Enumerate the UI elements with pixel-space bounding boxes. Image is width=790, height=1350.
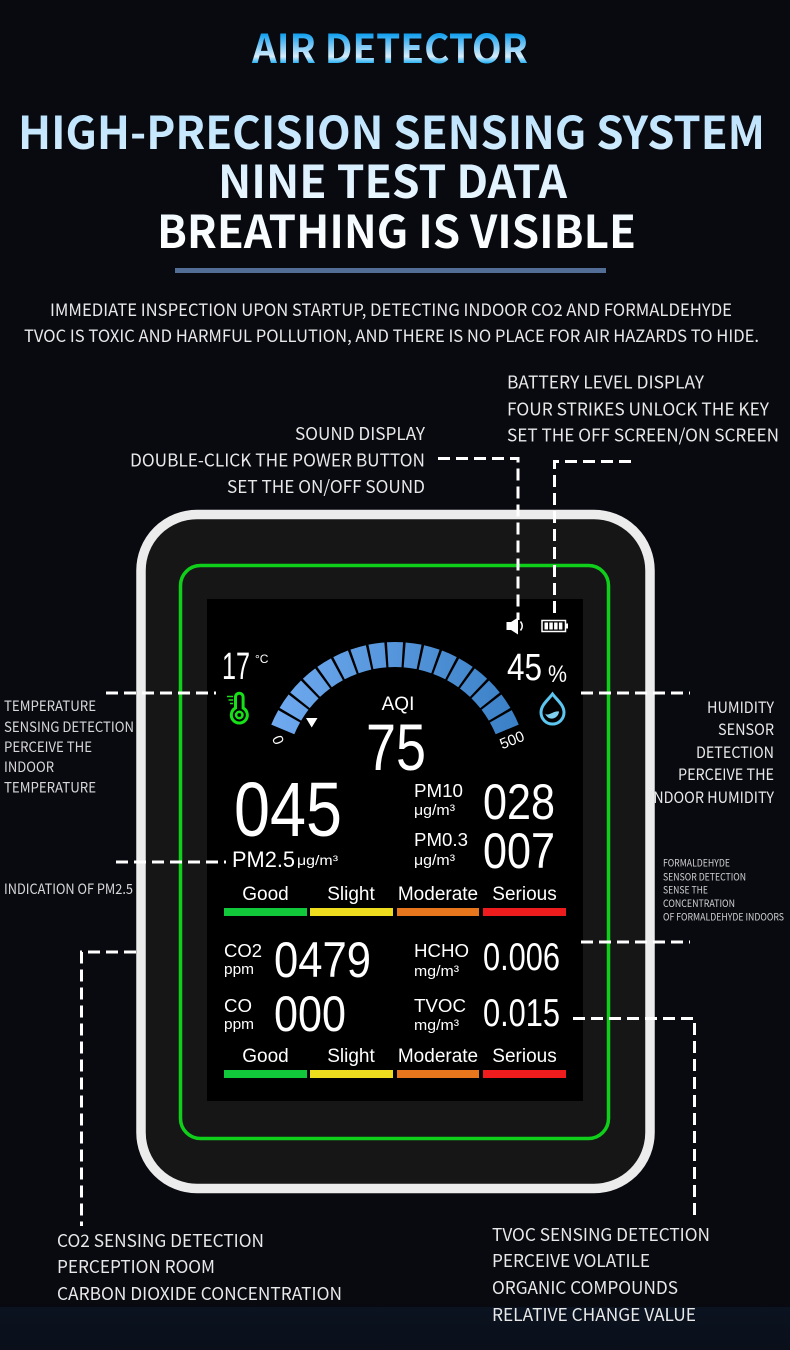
lower air quality scale: Slight (327, 1046, 375, 1067)
arrow: formaldehyde leader (581, 940, 690, 944)
callout: formaldehyde (663, 854, 784, 924)
callout: temperature (4, 696, 134, 798)
callout: temperature: PERCEIVE THE (4, 737, 92, 757)
callout: sound: SOUND DISPLAY (295, 421, 426, 446)
screen (207, 599, 583, 1101)
PM2.5 label: PM2.5 (232, 847, 295, 872)
callout: humidity: DETECTION (696, 741, 774, 763)
headline underline (175, 268, 606, 273)
PM10 reading (414, 774, 555, 830)
HCHO reading (414, 936, 560, 980)
callout: temperature: TEMPERATURE (4, 696, 96, 716)
lower air quality scale (224, 1046, 566, 1078)
TVOC reading: 0.015 (483, 992, 560, 1035)
AQI gauge arc (282, 655, 508, 730)
temperature unit: °C (255, 652, 269, 666)
lower air quality scale: Good (242, 1046, 289, 1067)
arrow: CO2 leader (82, 952, 136, 1226)
device body (141, 514, 650, 1188)
upper air quality scale: Serious (492, 884, 557, 905)
HCHO reading: HCHO (414, 941, 469, 961)
arrow: PM2.5 leader (116, 860, 226, 864)
gauge pointer (306, 718, 318, 728)
PM0.3 reading: 007 (483, 823, 555, 879)
callout: CO2: PERCEPTION ROOM (57, 1254, 215, 1279)
HCHO reading: mg/m³ (414, 963, 459, 980)
callout: TVOC: RELATIVE CHANGE VALUE (492, 1302, 696, 1327)
CO reading: CO (224, 996, 252, 1016)
intro paragraph (24, 296, 759, 347)
PM10 reading: μg/m³ (414, 802, 455, 819)
callout: battery: BATTERY LEVEL DISPLAY (507, 370, 705, 394)
icon: speaker (506, 618, 522, 634)
callout: formaldehyde: SENSE THE (663, 882, 708, 896)
callout: battery: FOUR STRIKES UNLOCK THE KEY (507, 396, 770, 422)
arrow: TVOC leader (573, 1018, 694, 1218)
CO reading: 000 (274, 986, 346, 1042)
humidity unit: % (548, 661, 567, 688)
callout: humidity (649, 696, 775, 808)
gauge max: 500 (497, 728, 527, 753)
PM0.3 reading: μg/m³ (414, 852, 455, 869)
PM2.5 value: 045 (234, 767, 342, 853)
CO2 reading: CO2 (224, 941, 262, 961)
callout: TVOC: TVOC SENSING DETECTION (492, 1222, 710, 1247)
PM0.3 reading: PM0.3 (414, 830, 468, 850)
title: AIR DETECTOR (251, 17, 528, 75)
TVOC reading: mg/m³ (414, 1017, 459, 1034)
CO reading: ppm (224, 1016, 254, 1033)
callout: sound: DOUBLE-CLICK THE POWER BUTTON (130, 448, 425, 472)
PM0.3 reading (414, 823, 555, 879)
gauge min: 0 (268, 733, 287, 747)
PM2.5 label: μg/m³ (297, 852, 338, 868)
callout: temperature: SENSING DETECTION (4, 717, 134, 737)
icon: thermometer (227, 693, 247, 723)
intro paragraph: TVOC IS TOXIC AND HARMFUL POLLUTION, AND THERE IS NO PLACE FOR AIR HAZARDS TO HIDE. (24, 322, 759, 347)
headline (18, 97, 765, 261)
callout: TVOC: ORGANIC COMPOUNDS (492, 1275, 678, 1300)
upper air quality scale: Good (242, 884, 289, 905)
PM10 reading: 028 (483, 774, 555, 830)
callout: PM2.5: INDICATION OF PM2.5 (4, 879, 133, 899)
icon: battery (542, 620, 568, 632)
lower air quality scale: Moderate (398, 1046, 478, 1067)
callout: battery (507, 370, 779, 448)
callout: CO2: CARBON DIOXIDE CONCENTRATION (57, 1281, 342, 1306)
TVOC reading (414, 992, 560, 1035)
PM10 reading: PM10 (414, 781, 463, 801)
callout: temperature: TEMPERATURE (4, 778, 96, 798)
upper air quality scale: Slight (327, 884, 375, 905)
icon: water drop (541, 694, 564, 724)
arrow: humidity leader (581, 692, 690, 694)
callout: CO2 (57, 1228, 342, 1306)
humidity value: 45 (507, 647, 542, 689)
upper air quality scale (224, 884, 566, 916)
CO reading (224, 986, 346, 1042)
callout: temperature: INDOOR (4, 757, 54, 777)
callout: formaldehyde: CONCENTRATION (663, 895, 735, 910)
green indicator ring (180, 566, 608, 1138)
callout: battery: SET THE OFF SCREEN/ON SCREEN (507, 422, 779, 448)
headline: NINE TEST DATA (218, 146, 568, 211)
AQI value: 75 (366, 710, 426, 784)
callout: formaldehyde: SENSOR DETECTION (663, 868, 746, 884)
CO2 reading (224, 932, 371, 988)
upper air quality scale: Moderate (398, 884, 478, 905)
temperature value: 17 (222, 646, 250, 688)
callout: humidity: PERCEIVE THE (678, 763, 774, 785)
callout: CO2: CO2 SENSING DETECTION (57, 1228, 264, 1253)
callout: TVOC (492, 1222, 710, 1327)
callout: sound: SET THE ON/OFF SOUND (227, 474, 425, 499)
intro paragraph: IMMEDIATE INSPECTION UPON STARTUP, DETECTING INDOOR CO2 AND FORMALDEHYDE (50, 296, 732, 321)
device (141, 514, 650, 1188)
arrow: sound leader (438, 458, 518, 620)
callout: humidity: HUMIDITY (707, 696, 775, 718)
CO2 reading: 0479 (274, 932, 371, 988)
AQI label: AQI (382, 694, 414, 715)
HCHO reading: 0.006 (483, 936, 560, 979)
callout: humidity: INDOOR HUMIDITY (649, 786, 775, 808)
callout: humidity: SENSOR (718, 718, 774, 740)
arrow: battery leader (554, 462, 631, 618)
callout: TVOC: PERCEIVE VOLATILE (492, 1248, 650, 1273)
callout: formaldehyde: FORMALDEHYDE (663, 854, 730, 870)
callout: sound (130, 421, 426, 499)
lower air quality scale: Serious (492, 1046, 557, 1067)
headline: HIGH-PRECISION SENSING SYSTEM (18, 97, 765, 162)
TVOC reading: TVOC (414, 996, 466, 1016)
PM2.5 label (232, 847, 338, 872)
arrow: temperature leader (106, 692, 216, 694)
CO2 reading: ppm (224, 961, 254, 978)
headline: BREATHING IS VISIBLE (157, 196, 636, 261)
